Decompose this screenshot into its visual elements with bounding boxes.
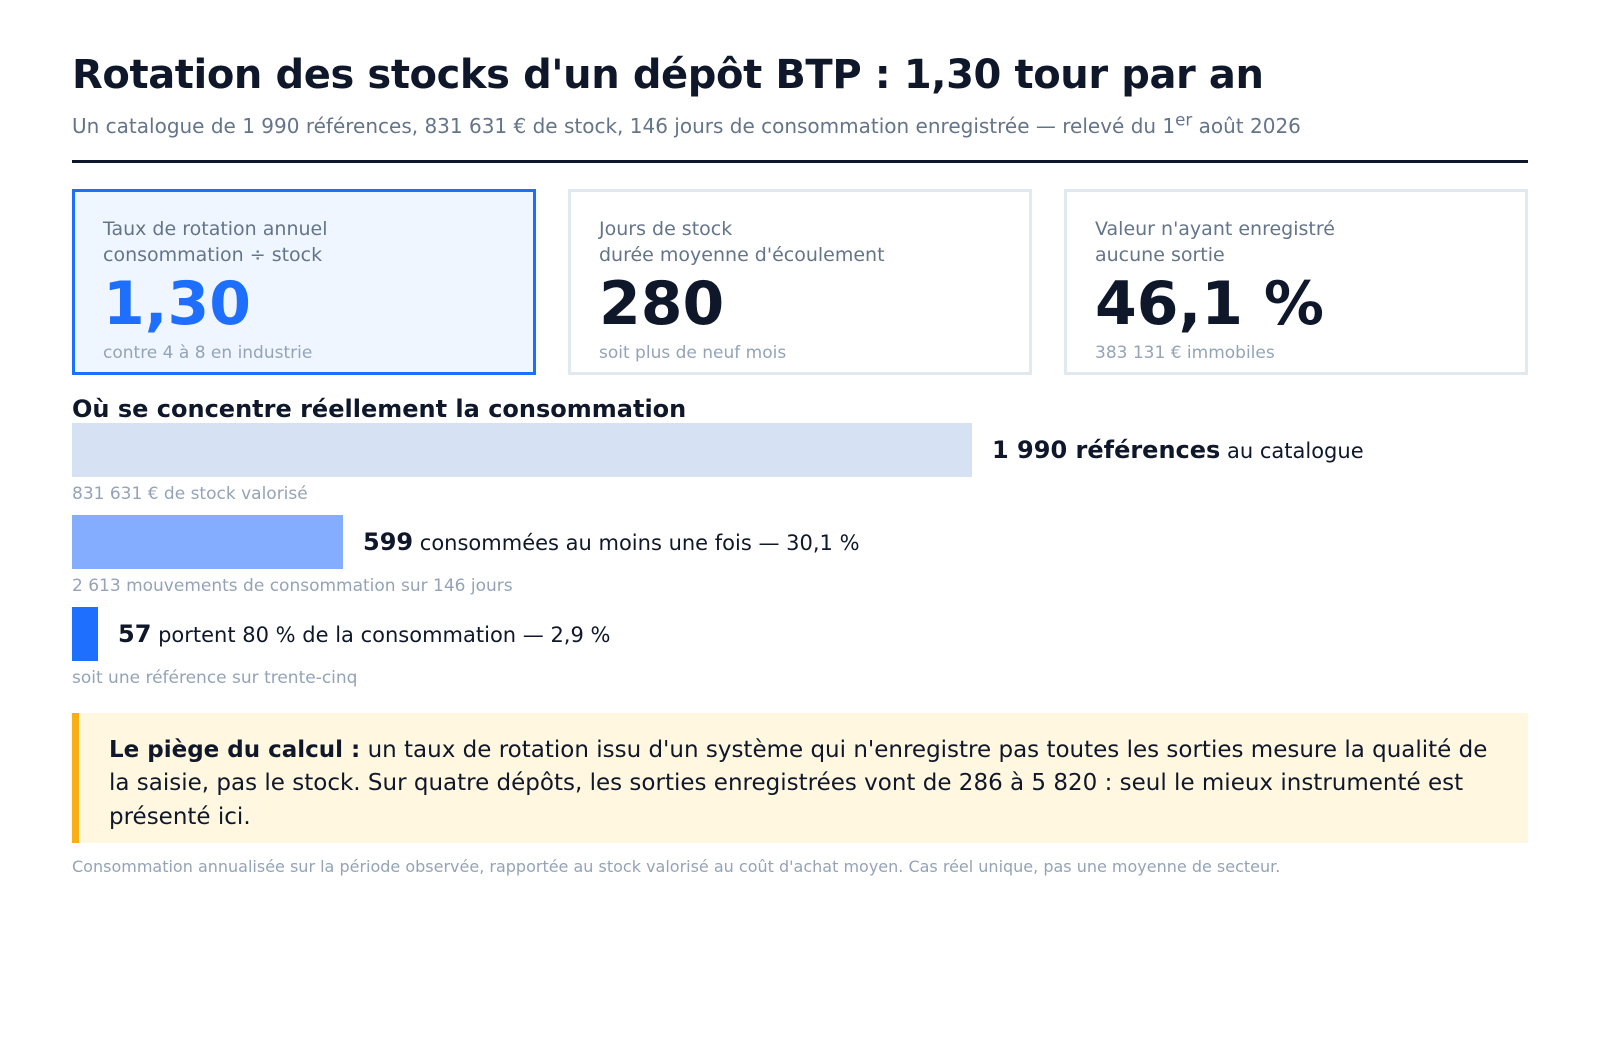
callout text: la saisie, pas le stock. Sur quatre dépôts, les sorties enregistrées vont de 286 à 5 820 : seul le mieux instrumenté est	[109, 770, 1463, 796]
title: Rotation des stocks d'un dépôt BTP : 1,30 tour par an	[72, 52, 1264, 98]
card label: Jours de stock	[599, 218, 732, 240]
header rule	[72, 160, 1528, 163]
bar note: consommées: 2 613 mouvements de consommation sur 146 jours	[72, 576, 513, 596]
bar: catalogue	[72, 423, 972, 477]
card label: Valeur n'ayant enregistré	[1095, 218, 1335, 240]
card value: 46,1 %	[1095, 269, 1324, 339]
card label	[1095, 218, 1335, 266]
bar note: catalogue: 831 631 € de stock valorisé	[72, 484, 308, 504]
bar label: catalogue: 1 990 références au catalogue	[992, 436, 1364, 464]
card value: 280	[599, 269, 724, 339]
bar note: 80 %: soit une référence sur trente-cinq	[72, 668, 357, 688]
subtitle: Un catalogue de 1 990 références, 831 631 € de stock, 146 jours de consommation enregistrée — relevé du 1er août 2026	[72, 110, 1301, 138]
card label: aucune sortie	[1095, 244, 1225, 266]
callout text	[109, 737, 1487, 830]
section heading: Où se concentre réellement la consommation	[72, 395, 686, 423]
callout text: présenté ici.	[109, 804, 251, 830]
card label: durée moyenne d'écoulement	[599, 244, 885, 266]
card note: 383 131 € immobiles	[1095, 343, 1275, 363]
callout text: Le piège du calcul : un taux de rotation issu d'un système qui n'enregistre pas toutes les sorties mesure la qualité de	[109, 737, 1487, 763]
card label: Taux de rotation annuel	[103, 218, 328, 240]
card value: 1,30	[103, 269, 251, 339]
card label	[598, 218, 885, 266]
callout	[72, 713, 1528, 843]
card: valeur immobile	[1064, 189, 1528, 375]
card: taux de rotation	[72, 189, 536, 375]
bar: 80 %	[72, 607, 98, 661]
card note: soit plus de neuf mois	[599, 343, 786, 363]
card: jours de stock	[568, 189, 1032, 375]
card label: consommation ÷ stock	[103, 244, 322, 266]
card label	[102, 218, 328, 266]
bar: consommées	[72, 515, 343, 569]
bar label: 80 %: 57 portent 80 % de la consommation — 2,9 %	[118, 620, 610, 648]
footnote: Consommation annualisée sur la période observée, rapportée au stock valorisé au coût d'achat moyen. Cas réel unique, pas une moyenne de secteur.	[72, 857, 1280, 876]
bar label: consommées: 599 consommées au moins une fois — 30,1 %	[363, 528, 860, 556]
card note: contre 4 à 8 en industrie	[103, 343, 312, 363]
